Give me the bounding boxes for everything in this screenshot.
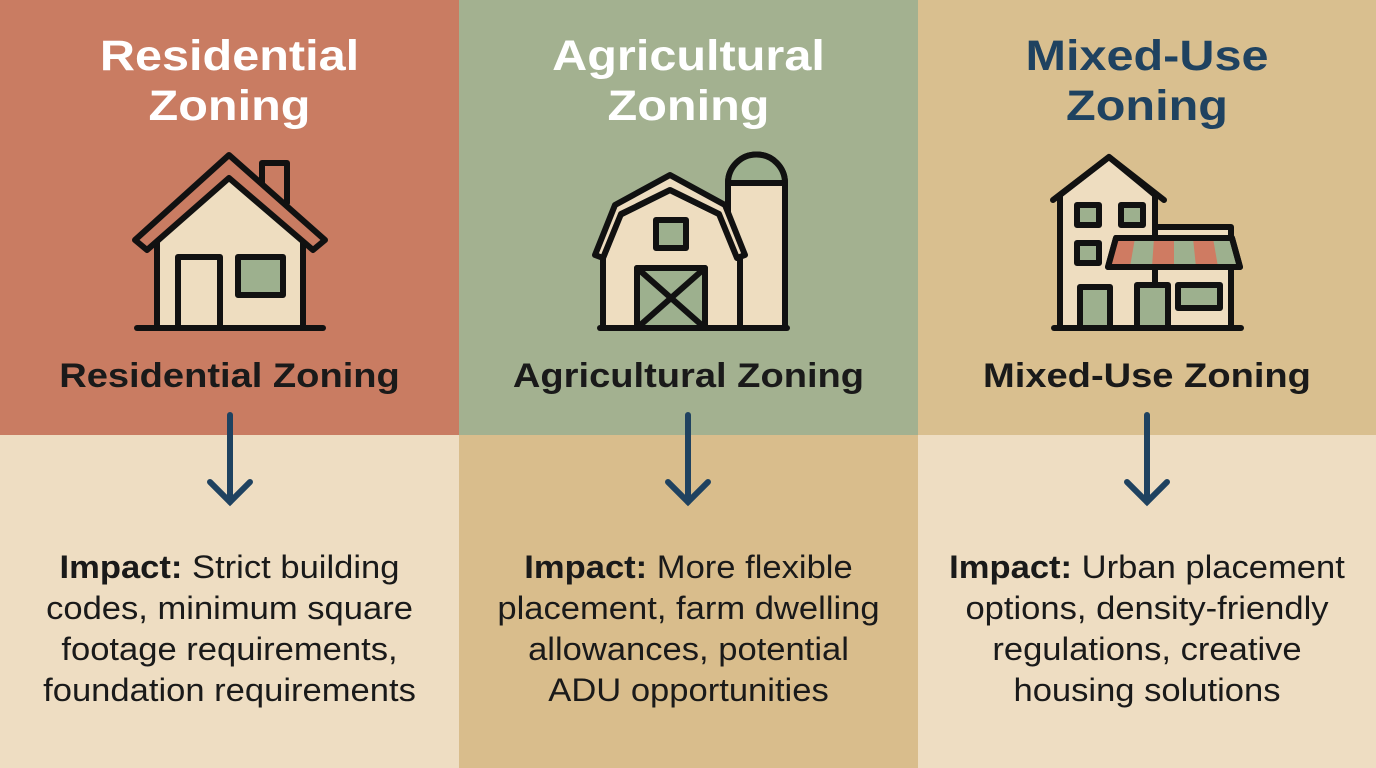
text: impact: options, density-friendly (965, 590, 1329, 626)
panel: residential (0, 0, 459, 768)
text: impact (949, 549, 1345, 708)
title: agricultural: Agricultural (552, 32, 825, 80)
text: impact (43, 549, 416, 708)
text: impact: footage requirements, (61, 631, 398, 667)
text: impact: allowances, potential (528, 631, 849, 667)
text: impact: foundation requirements (43, 672, 416, 708)
title: mixed-use (1025, 32, 1269, 130)
text: impact: regulations, creative (992, 631, 1302, 667)
subtitle: Residential Zoning (59, 357, 400, 395)
text: impact (497, 549, 880, 708)
panel: agricultural (459, 0, 918, 768)
title: mixed-use: Mixed-Use (1025, 32, 1269, 80)
title: residential: Residential (100, 32, 359, 80)
title: agricultural (552, 32, 825, 130)
title: residential (100, 32, 359, 130)
title: residential: Zoning (149, 82, 310, 130)
text: impact: codes, minimum square (46, 590, 413, 626)
title: mixed-use: Zoning (1066, 82, 1228, 130)
subtitle: Mixed-Use Zoning (983, 357, 1311, 395)
title: agricultural: Zoning (608, 82, 769, 130)
icon: house (132, 152, 328, 506)
icon: barn (592, 152, 790, 506)
icon: mixed-use building (1050, 154, 1244, 506)
text: impact: Impact: Urban placement (949, 549, 1345, 585)
text: impact: housing solutions (1013, 672, 1281, 708)
arrow (210, 415, 250, 502)
text: impact: placement, farm dwelling (497, 590, 880, 626)
panel: mixed-use (918, 0, 1376, 768)
text: impact: ADU opportunities (548, 672, 829, 708)
subtitle: Agricultural Zoning (513, 357, 864, 395)
text: impact: Impact: More flexible (524, 549, 853, 585)
text: impact: Impact: Strict building (60, 549, 399, 585)
